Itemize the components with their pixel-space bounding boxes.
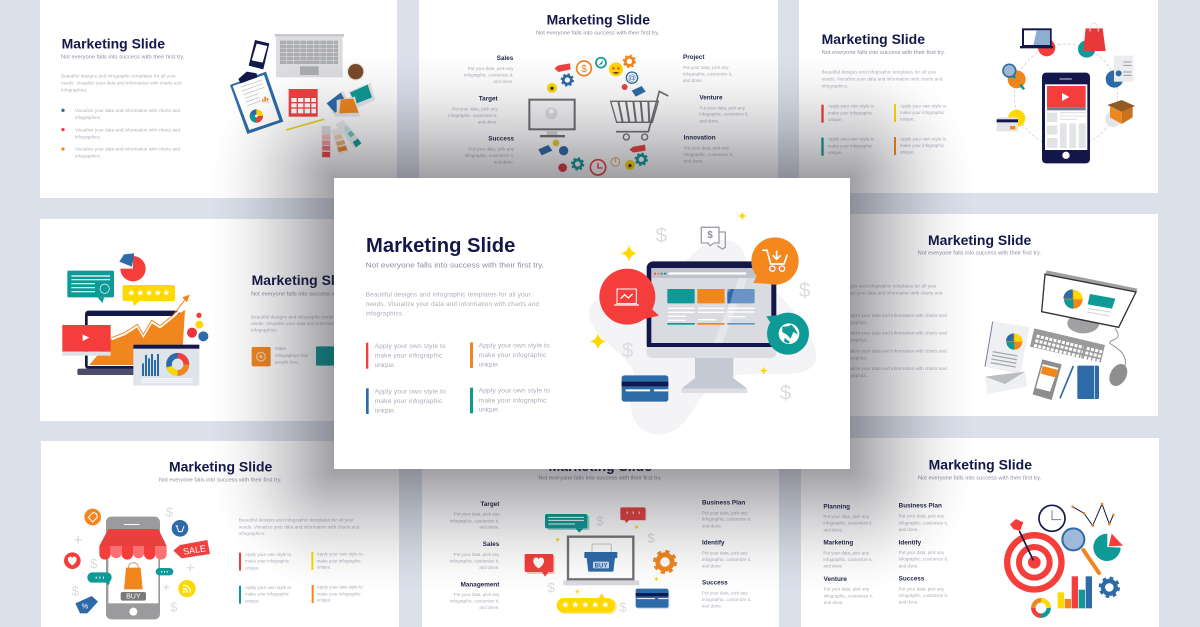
illustration: mobile shop: % <box>82 603 88 610</box>
feature: red <box>366 343 446 369</box>
illustration: monitor and cart with icons <box>529 56 668 175</box>
panel: top middle slide <box>419 0 778 180</box>
right labels: Business Plan <box>702 499 745 506</box>
feature: megaphone <box>316 346 335 366</box>
description: needs. Visualize your data and information with charts and <box>239 524 360 529</box>
title: Marketing Slide <box>252 272 355 288</box>
left column: Marketing <box>823 540 853 547</box>
left labels <box>450 501 500 610</box>
feature: target: infographics that <box>275 353 309 358</box>
feature: orange <box>470 342 550 369</box>
right column: infographic, customize it, <box>899 593 948 598</box>
feature items: Apply your own style to <box>900 136 947 141</box>
feature items: unique. <box>900 117 915 122</box>
subtitle: Not everyone falls into success with their first try. <box>536 31 659 37</box>
left labels: Sales <box>497 55 514 62</box>
panel: middle right slide <box>800 214 1158 416</box>
right column: and done. <box>899 600 919 605</box>
illustration: computer desk <box>985 270 1137 400</box>
feature: red: unique. <box>375 362 395 369</box>
icon: dollar bubbles: $ <box>707 230 713 241</box>
feature: red: make your infographic <box>375 353 443 360</box>
title: Marketing Slide <box>62 35 165 51</box>
description: needs. Visualize your data and information with charts and <box>822 290 943 295</box>
title: Marketing Slide <box>169 459 273 475</box>
feature: target: people love. <box>275 360 299 365</box>
title: Marketing Slide <box>822 31 925 47</box>
description <box>822 284 943 295</box>
description: infographics. <box>61 87 88 92</box>
icon: teal globe bubble <box>766 313 809 355</box>
description: needs. Visualize your data and information with charts and <box>366 301 539 308</box>
right labels: Put your data, pick any <box>702 551 748 556</box>
right labels: Put your data, pick any <box>683 65 729 70</box>
left column: Planning <box>823 503 850 510</box>
description: Beautiful designs and infographic templates for all your <box>822 70 937 75</box>
illustration: monitor and cart with icons: @ <box>628 74 636 83</box>
left column <box>823 503 873 605</box>
feature items: make your infographic <box>900 143 945 148</box>
feature items: make your infographic <box>317 591 362 596</box>
illustration: laptop growth chart <box>62 253 208 386</box>
illustration: monitor and cart with icons: $ <box>581 64 587 75</box>
right column <box>899 503 948 605</box>
title: Marketing Slide <box>366 235 515 257</box>
right column: and done. <box>899 563 919 568</box>
feature: blue: Apply your own style to <box>375 388 446 395</box>
description <box>239 518 360 536</box>
left labels: Sales <box>483 541 500 548</box>
left column: infographic, customize it, <box>823 521 873 526</box>
right labels <box>683 54 749 163</box>
left labels: infographic, customize it, <box>464 72 513 77</box>
right column: Put your data, pick any <box>899 550 945 555</box>
description: Beautiful designs and infographic templates for all your <box>61 74 176 79</box>
right labels: Venture <box>699 94 723 101</box>
description <box>61 74 182 92</box>
shadow of center slide <box>209 53 975 594</box>
bullet list: Visualize your data and information with charts and <box>75 147 180 152</box>
icons: dollar signs <box>622 224 811 404</box>
right labels: and done. <box>702 603 722 608</box>
left column: infographic, customize it, <box>824 593 873 598</box>
icon: dollar bubbles <box>701 227 725 249</box>
panel: top right slide <box>799 0 1158 193</box>
description: needs. Visualize your data and information with charts and <box>61 80 182 85</box>
feature items: make your infographic <box>828 110 873 115</box>
description: infographics. <box>251 328 278 333</box>
description: needs. Visualize your data and information with charts and <box>822 76 943 81</box>
right labels: infographic, customize it, <box>699 112 749 117</box>
bullet list: infographics. <box>842 373 868 378</box>
description <box>366 291 539 318</box>
description: Beautiful designs and infographic templates for all your <box>239 518 354 523</box>
left labels: infographic, customize it, <box>450 558 499 563</box>
left labels: Put your data, pick any <box>468 66 514 71</box>
illustration: online store laptop: $ <box>547 580 555 595</box>
illustration: mobile shop: $ <box>166 505 174 520</box>
left column: infographic, customize it, <box>823 557 873 562</box>
illustration: phone with ring of icons <box>997 23 1135 163</box>
description: needs. Visualize your data and information with charts and <box>251 321 372 326</box>
illustration: online store laptop: BUY <box>595 563 607 569</box>
bullet list: Visualize your data and information with charts and <box>842 348 947 353</box>
description: Beautiful designs and infographic templates for all your <box>251 314 366 319</box>
subtitle: Not everyone falls into success with their first try. <box>822 50 945 56</box>
description: infographics. <box>239 531 265 536</box>
left labels: and done. <box>479 605 499 610</box>
panel: bottom right slide <box>801 438 1159 627</box>
feature: target <box>252 346 309 366</box>
feature items: make your infographic <box>828 143 873 148</box>
bullet list: Visualize your data and information with charts and <box>842 366 947 371</box>
feature: orange: unique. <box>479 362 499 369</box>
right labels: Project <box>683 54 705 61</box>
right column: Identify <box>899 539 922 546</box>
feature: blue: unique. <box>375 407 395 414</box>
description: Beautiful designs and infographic templates for all your <box>822 284 937 289</box>
feature items: make your infographic <box>317 558 362 563</box>
subtitle: Not everyone falls into success with their first try. <box>918 251 1041 257</box>
feature items: Apply your own style to <box>900 103 947 108</box>
right labels: Identify <box>702 540 725 547</box>
feature items: unique. <box>828 150 843 155</box>
illustration: mobile shop: SALE <box>182 543 207 557</box>
right column: and done. <box>899 527 919 532</box>
title: Marketing Slide <box>929 456 1032 472</box>
panel: bottom middle slide <box>422 440 779 627</box>
feature items: make your infographic <box>245 559 290 564</box>
illustration: computer with icons <box>589 212 816 435</box>
right labels: Innovation <box>684 134 716 141</box>
bullet list: Visualize your data and information with charts and <box>75 127 180 132</box>
panel: bottom left slide <box>41 441 399 627</box>
right labels: and done. <box>684 158 704 163</box>
left labels: Target <box>479 96 499 103</box>
illustration: online store laptop: $ <box>619 600 627 615</box>
right column: Put your data, pick any <box>899 514 945 519</box>
left column: and done. <box>824 600 844 605</box>
left column: and done. <box>823 527 843 532</box>
feature: blue: make your infographic <box>375 398 443 405</box>
feature items: Apply your own style to <box>317 585 363 590</box>
left labels: Put your data, pick any <box>454 552 500 557</box>
right labels: and done. <box>702 523 722 528</box>
left labels <box>448 55 515 164</box>
feature items: unique. <box>245 598 260 603</box>
icon: credit card <box>622 375 668 402</box>
title: Marketing Slide <box>928 232 1032 248</box>
left labels: and done. <box>479 525 499 530</box>
icons: dollar signs: $ <box>799 279 811 302</box>
left labels: and done. <box>478 120 498 125</box>
bullet list: infographics. <box>842 338 868 343</box>
title: Marketing Slide <box>547 11 650 27</box>
right column: Put your data, pick any <box>899 586 945 591</box>
left column: Put your data, pick any <box>824 587 870 592</box>
feature: teal: unique. <box>479 407 499 414</box>
right labels <box>702 499 751 608</box>
right labels: Put your data, pick any <box>702 510 748 515</box>
background blob <box>589 240 816 435</box>
right labels: Put your data, pick any <box>684 145 730 150</box>
subtitle: Not everyone falls into success with their first try. <box>918 476 1041 482</box>
right labels: and done. <box>702 564 722 569</box>
feature items: unique. <box>245 565 260 570</box>
feature items: Apply your own style to <box>245 552 292 557</box>
left labels: and done. <box>493 79 513 84</box>
panel: center slide <box>334 178 850 469</box>
feature items <box>239 552 363 604</box>
right labels: infographic, customize it, <box>702 557 751 562</box>
description: infographics. <box>366 311 404 318</box>
illustration: mobile shop: $ <box>72 583 80 598</box>
left labels: Target <box>480 501 500 508</box>
icon: monitor <box>647 261 776 393</box>
illustration: mobile shop: $ <box>90 556 98 571</box>
bullet list <box>842 313 947 378</box>
right labels: infographic, customize it, <box>683 72 732 77</box>
left labels: infographic, customize it, <box>448 113 498 118</box>
illustration: mobile shop: $ <box>170 599 178 614</box>
right labels: Put your data, pick any <box>702 590 748 595</box>
left labels: infographic, customize it, <box>450 518 499 523</box>
feature: orange: make your infographic <box>479 352 547 359</box>
feature items: Apply your own style to <box>317 552 363 557</box>
subtitle: Not everyone falls into success with their first try. <box>538 476 662 482</box>
bullet list: infographics. <box>75 115 101 120</box>
feature: orange: Apply your own style to <box>479 342 550 349</box>
feature items: unique. <box>317 598 331 603</box>
subtitle: Not everyone falls into success with their first try. <box>61 54 184 60</box>
left column: Venture <box>824 576 847 583</box>
icons: sparkles <box>590 212 768 375</box>
right labels: infographic, customize it, <box>684 152 733 157</box>
illustration: mobile shop: BUY <box>126 594 141 601</box>
description <box>822 70 943 88</box>
illustration: mobile shop <box>64 505 210 619</box>
left labels: Success <box>488 135 514 142</box>
bullet list: infographics. <box>842 355 868 360</box>
right column: Business Plan <box>899 503 942 510</box>
description: Beautiful designs and infographic templates for all your <box>366 291 531 298</box>
icons: dollar signs: $ <box>656 224 668 247</box>
bullet list: Visualize your data and information with charts and <box>75 108 180 113</box>
bullet list <box>61 108 180 159</box>
right labels: Success <box>702 580 728 587</box>
feature items: make your infographic <box>245 592 290 597</box>
left labels: Put your data, pick any <box>454 512 500 517</box>
illustration: online store laptop: $ <box>596 514 604 529</box>
feature: blue <box>366 388 446 414</box>
right labels: infographic, customize it, <box>702 597 751 602</box>
panel: top left slide <box>40 0 397 198</box>
feature items: Apply your own style to <box>245 585 292 590</box>
bullet list: Visualize your data and information with charts and <box>842 313 947 318</box>
left labels: and done. <box>494 159 514 164</box>
feature items: make your infographic <box>900 110 945 115</box>
right column: infographic, customize it, <box>899 520 948 525</box>
subtitle: Not everyone falls into success with their first try. <box>251 291 374 297</box>
left labels: infographic, customize it, <box>450 599 499 604</box>
right labels: and done. <box>683 78 703 83</box>
left labels: Put your data, pick any <box>452 107 498 112</box>
left labels: Put your data, pick any <box>454 592 500 597</box>
left column: and done. <box>823 564 843 569</box>
feature items <box>821 103 947 156</box>
right column: infographic, customize it, <box>899 557 948 562</box>
bullet list: infographics. <box>75 154 101 159</box>
feature items: unique. <box>317 565 331 570</box>
description <box>251 314 372 333</box>
left labels: Management <box>461 581 500 588</box>
feature: teal: Apply your own style to <box>479 388 550 395</box>
icons: dollar signs: $ <box>622 339 634 362</box>
feature items: unique. <box>900 150 915 155</box>
left labels: infographic, customize it, <box>465 153 514 158</box>
bullet list: infographics. <box>842 320 868 325</box>
right labels: and done. <box>699 118 719 123</box>
description: infographics. <box>822 83 848 88</box>
left column: Put your data, pick any <box>823 550 870 555</box>
bullet list: infographics. <box>75 134 101 139</box>
feature items: Apply your own style to <box>828 137 875 142</box>
subtitle: Not everyone falls into success with their first try. <box>366 260 544 269</box>
bullet list: Visualize your data and information with charts and <box>842 331 947 336</box>
left labels: and done. <box>479 565 499 570</box>
icon: orange cart bubble <box>751 237 799 285</box>
illustration: office desk <box>230 34 375 158</box>
icons: dollar signs: $ <box>780 381 792 404</box>
feature items: unique. <box>828 117 843 122</box>
subtitle: Not everyone falls into success with their first try. <box>159 478 282 484</box>
feature: teal: make your infographic <box>479 397 547 404</box>
center slide content <box>366 212 816 434</box>
right column: Success <box>899 576 925 583</box>
right labels: infographic, customize it, <box>702 517 751 522</box>
right labels: Put your data, pick any <box>699 105 746 110</box>
icon: red chart bubble <box>599 269 659 325</box>
feature: red: Apply your own style to <box>375 343 446 350</box>
illustration: target and charts <box>1004 503 1123 616</box>
title: Marketing Slide <box>549 458 652 474</box>
illustration: online store laptop <box>525 507 675 615</box>
feature: target: Make <box>275 346 286 351</box>
illustration: online store laptop: $ <box>647 531 655 546</box>
feature items: Apply your own style to <box>828 104 875 109</box>
panel: middle left slide <box>40 219 400 421</box>
left column: Put your data, pick any <box>823 514 870 519</box>
feature: teal <box>470 388 550 414</box>
left labels: Put your data, pick any <box>468 146 515 151</box>
